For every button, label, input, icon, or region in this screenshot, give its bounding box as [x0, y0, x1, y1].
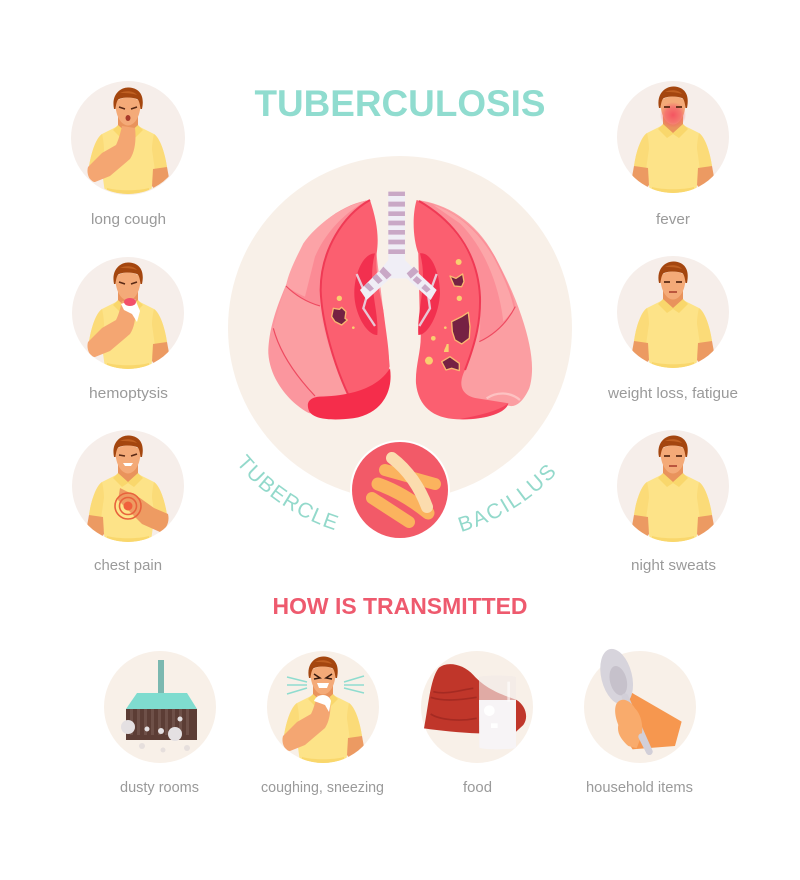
- label: food: [463, 780, 492, 796]
- pain rings: [115, 493, 141, 519]
- label: hemoptysis: [89, 386, 168, 402]
- panel: lungs and bacillus: [228, 156, 572, 538]
- person coughing: [87, 87, 169, 197]
- label: fever: [656, 212, 690, 228]
- label: chest pain: [94, 558, 162, 574]
- icon: hand holding spoon: [595, 645, 682, 752]
- panel: coughing, sneezing: [261, 651, 384, 796]
- thin person: [632, 261, 714, 371]
- label: weight loss, fatigue: [607, 386, 738, 402]
- person sneezing: [282, 656, 364, 766]
- sweating person: [632, 435, 714, 545]
- title: TUBERCULOSIS: [254, 83, 546, 124]
- panel: fever: [617, 81, 729, 228]
- panel: hemoptysis: [72, 257, 184, 402]
- label: night sweats: [631, 558, 716, 574]
- panel: night sweats: [617, 430, 729, 574]
- bacteria spots: [337, 259, 462, 365]
- icon: broom: [121, 660, 197, 752]
- lungs illustration: [268, 192, 532, 419]
- panel: chest pain: [72, 430, 184, 574]
- heading: how is transmitted: HOW IS TRANSMITTED: [272, 593, 528, 619]
- panel: long cough: [71, 81, 185, 228]
- bacillus circle: [350, 440, 450, 540]
- right lung: [414, 200, 532, 419]
- icon: meat and milk: [424, 664, 526, 749]
- trachea and bronchi: [360, 192, 437, 300]
- label: household items: [586, 780, 693, 796]
- panel: household items: [584, 645, 696, 796]
- label: coughing, sneezing: [261, 780, 384, 796]
- person with bloody tissue: [87, 262, 169, 372]
- panel: dusty rooms: [104, 651, 216, 796]
- person with fever: [632, 86, 714, 196]
- label: long cough: [91, 212, 166, 228]
- panel: weight loss, fatigue: [607, 256, 738, 402]
- sneeze lines: [287, 676, 364, 694]
- curved label: bacillus: BACILLUS: [458, 465, 555, 532]
- lung background circle: [228, 156, 572, 500]
- label: dusty rooms: [120, 780, 199, 796]
- person with chest pain: [87, 435, 169, 545]
- curved label: tubercle: TUBERCLE: [240, 454, 338, 530]
- panel: food: [421, 651, 533, 796]
- cavities: [332, 274, 470, 371]
- left lung: [268, 200, 391, 419]
